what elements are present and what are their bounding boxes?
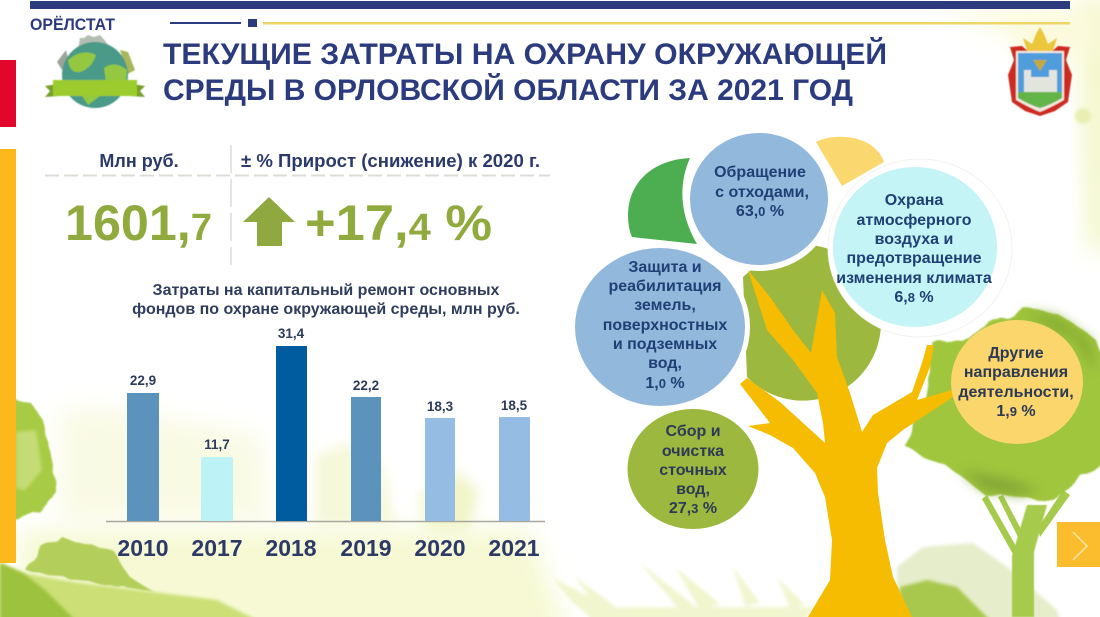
bubble: wastewater: Сбор и: [665, 423, 721, 440]
panel: key figures: [45, 145, 550, 265]
chart heading: Затраты на капитальный ремонт основных: [153, 282, 500, 299]
tree trunk: [740, 270, 953, 617]
bubble: other activities: [951, 320, 1083, 444]
bar 2010: 2010: [117, 535, 169, 561]
bubble: air protection: атмосферного: [857, 212, 972, 229]
bubble: air protection: предотвращение: [846, 250, 982, 267]
bubble: waste management: [684, 127, 834, 271]
bubble: land and water: поверхностных: [603, 317, 727, 334]
bar 2021: 18,5: [501, 398, 528, 413]
title: СРЕДЫ В ОРЛОВСКОЙ ОБЛАСТИ ЗА 2021 ГОД: [163, 73, 853, 107]
side accent: orange: [0, 149, 16, 563]
chart heading: [132, 282, 520, 318]
value: 1601,7: 1601,7: [65, 195, 212, 251]
bubble: air protection: [828, 159, 1012, 337]
bar chart: [106, 326, 545, 561]
olive leaf: [743, 245, 881, 401]
side accent: red: [0, 60, 16, 127]
bubble: wastewater: вод,: [676, 481, 710, 498]
bar 2020: 18,3: [427, 399, 454, 414]
bar 2019: 2019: [340, 535, 392, 561]
bar 2019: 22,2: [353, 378, 379, 393]
bubble: other activities: 1,9 %: [996, 403, 1036, 420]
bubble: wastewater: сточных: [659, 462, 727, 479]
bar 2017: [191, 437, 243, 561]
bubble: other activities: направления: [964, 364, 1068, 381]
bubble: other activities: Другие: [988, 345, 1044, 362]
bubble: land and water: вод,: [648, 355, 682, 372]
brand label: ОРЁЛСТАТ: [30, 16, 115, 34]
bar 2020: [414, 399, 466, 561]
icon: up arrow: [243, 197, 295, 246]
bar 2017: 2017: [191, 535, 243, 561]
bubble: land and water: 1,0 %: [645, 375, 685, 392]
bar 2018: 31,4: [278, 326, 305, 341]
bar 2010: [117, 373, 169, 561]
bubble: air protection: воздуха и: [875, 231, 953, 248]
bar 2018: 2018: [265, 535, 317, 561]
bubble: air protection: 6,8 %: [894, 289, 934, 306]
bubble: waste management: 63,0 %: [736, 203, 784, 220]
top navy bar: [30, 1, 1070, 9]
bar 2019: [340, 378, 392, 561]
bar 2018: [265, 326, 317, 561]
bar 2021: [488, 398, 540, 561]
bar 2021: 2021: [488, 535, 540, 561]
bubble: land and water: реабилитация: [608, 278, 722, 295]
icon: coat of arms: [1008, 27, 1072, 116]
next button: [1057, 522, 1100, 567]
bubble: waste management: с отходами,: [715, 184, 809, 201]
bubble: other activities: деятельности,: [958, 384, 1074, 401]
bar 2020: 2020: [414, 535, 466, 561]
bar 2017: 11,7: [204, 437, 230, 452]
title: ТЕКУЩИЕ ЗАТРАТЫ НА ОХРАНУ ОКРУЖАЮЩЕЙ: [163, 37, 887, 71]
bar 2010: 22,9: [130, 373, 156, 388]
bubble: wastewater: 27,3 %: [669, 500, 717, 517]
table dividers: [45, 145, 550, 265]
bubble: land and water: и подземных: [613, 336, 717, 353]
bubble: wastewater: [628, 409, 758, 529]
header divider: navy line, square and yellow line: [170, 19, 1070, 27]
left foliage: [0, 398, 257, 617]
heading: million rubles: Млн руб.: [99, 151, 179, 171]
bubble: land and water: земель,: [634, 297, 696, 314]
bubble: land and water: Защита и: [628, 259, 702, 276]
bubble: air protection: изменения климата: [836, 270, 992, 287]
tree diagram: [570, 127, 1083, 617]
yellow leaf: [816, 137, 884, 186]
heading: percent change: ± % Прирост (снижение) к 2020 г.: [241, 151, 540, 171]
chart heading: фондов по охране окружающей среды, млн руб.: [132, 301, 520, 318]
grass: [553, 563, 815, 617]
right background tree: [897, 308, 1100, 617]
icon: globe with ribbon: [45, 35, 145, 108]
bubble: air protection: Охрана: [885, 192, 943, 209]
bubble: wastewater: очистка: [662, 443, 724, 460]
bubble: waste management: Обращение: [714, 164, 806, 181]
value: +17,4 %: +17,4 %: [305, 195, 492, 251]
dark green leaf: [628, 158, 697, 244]
bubble: land and water: [570, 243, 750, 411]
title: [163, 37, 887, 107]
